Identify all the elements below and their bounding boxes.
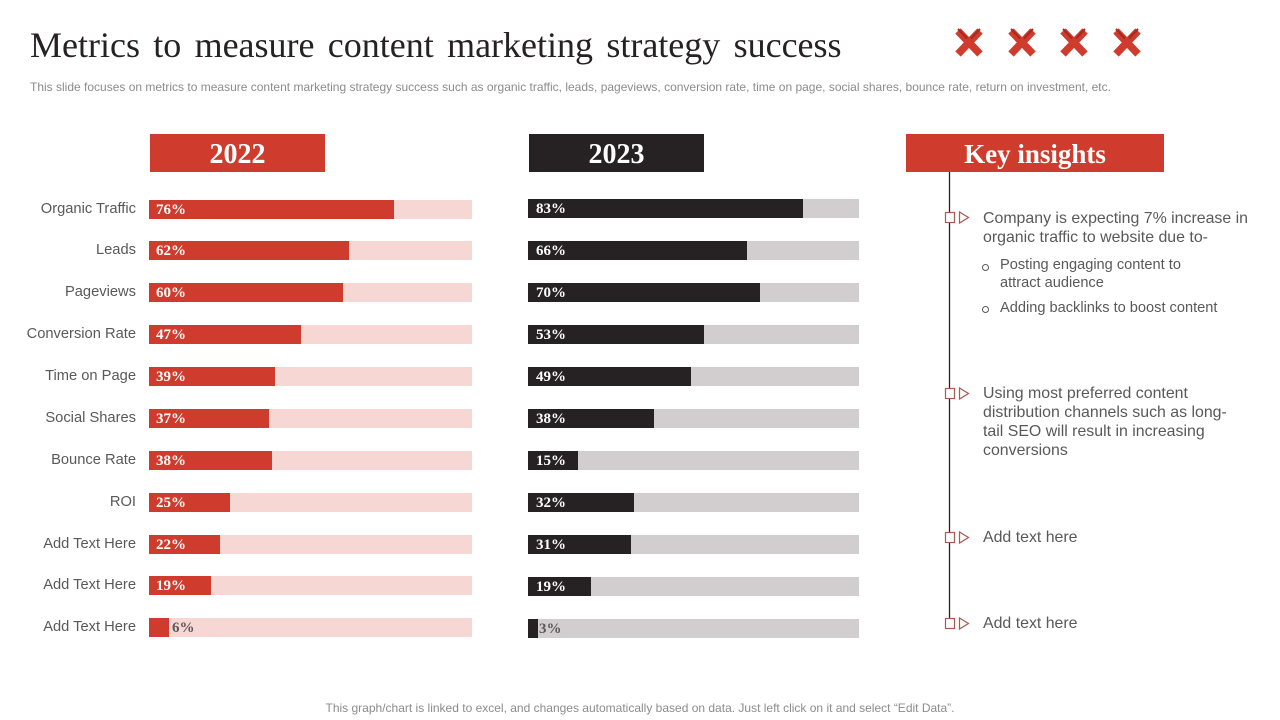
bar chart: 2022: 47% bbox=[156, 327, 186, 343]
title: Metrics to measure content marketing strategy success bbox=[30, 25, 842, 65]
bar chart: 2023: 32% bbox=[536, 495, 566, 511]
timeline with markers bbox=[944, 172, 970, 630]
metric labels: Add Text Here bbox=[43, 536, 136, 552]
insight: distribution channels: Using most preferred content bbox=[983, 385, 1188, 402]
bar chart: 2022: 6% bbox=[172, 620, 194, 636]
bar chart: 2022: 62% bbox=[156, 243, 186, 259]
insight bullet: engaging content bbox=[982, 257, 1181, 291]
bar chart: 2023: 66% bbox=[536, 243, 566, 259]
bar chart: 2023: 49% bbox=[536, 369, 566, 385]
bar chart: 2022: 37% bbox=[156, 411, 186, 427]
footnote: This graph/chart is linked to excel, and changes automatically based on data. Just left click on it and select “Edit Data”. bbox=[326, 701, 954, 715]
bar chart: 2022: 39% bbox=[156, 369, 186, 385]
insight: distribution channels: tail SEO will result in increasing bbox=[983, 423, 1205, 440]
heading: key insights: Key insights bbox=[964, 139, 1106, 169]
heading: key insights bbox=[906, 134, 1164, 172]
subtitle: This slide focuses on metrics to measure content marketing strategy success such as organic traffic, leads, pageviews, conversion rate, time on page, social shares, bounce rate, return on investment, etc. bbox=[30, 80, 1111, 94]
bar chart: 2023 bbox=[528, 199, 859, 638]
metric labels: Add Text Here bbox=[43, 619, 136, 635]
bar chart: 2023: 19% bbox=[536, 579, 566, 595]
metric labels bbox=[27, 201, 136, 635]
metric labels: Social Shares bbox=[45, 410, 136, 426]
bar chart: 2023: 3% bbox=[539, 621, 562, 637]
metric labels: Conversion Rate bbox=[27, 326, 136, 342]
insight bullet: engaging content: attract audience bbox=[1000, 275, 1104, 291]
heading: 2023 bbox=[529, 134, 704, 172]
insight bullet: backlinks: Adding backlinks to boost content bbox=[1000, 300, 1217, 316]
insight: add text 2: Add text here bbox=[983, 615, 1078, 632]
heading: 2023: 2023 bbox=[588, 139, 644, 170]
heading: 2022 bbox=[150, 134, 325, 172]
metric labels: Organic Traffic bbox=[41, 201, 136, 217]
insight: add text 1: Add text here bbox=[983, 529, 1078, 546]
bar chart: 2022 bbox=[149, 200, 472, 637]
insight: organic traffic bbox=[983, 210, 1248, 246]
heading: 2022: 2022 bbox=[210, 139, 266, 170]
bar chart: 2022: 22% bbox=[156, 537, 186, 553]
bar chart: 2023: 53% bbox=[536, 327, 566, 343]
metric labels: Leads bbox=[96, 242, 136, 258]
bar chart: 2022: 19% bbox=[156, 578, 186, 594]
bar chart: 2022: 60% bbox=[156, 285, 186, 301]
insight: distribution channels: conversions bbox=[983, 442, 1068, 459]
metric labels: ROI bbox=[110, 494, 136, 510]
insight: distribution channels bbox=[983, 385, 1227, 459]
icon: four red cross marks bbox=[955, 28, 1141, 57]
bar chart: 2023: 15% bbox=[536, 453, 566, 469]
bar chart: 2022: 76% bbox=[156, 202, 186, 218]
bar chart: 2023: 83% bbox=[536, 201, 566, 217]
insight bullet: engaging content: Posting engaging content to bbox=[1000, 257, 1181, 273]
bar chart: 2022: 38% bbox=[156, 453, 186, 469]
metric labels: Add Text Here bbox=[43, 577, 136, 593]
bar chart: 2023: 70% bbox=[536, 285, 566, 301]
metric labels: Time on Page bbox=[45, 368, 136, 384]
metric labels: Pageviews bbox=[65, 284, 136, 300]
insight: organic traffic: organic traffic to website due to- bbox=[983, 229, 1208, 246]
insight: organic traffic: Company is expecting 7% increase in bbox=[983, 210, 1248, 227]
bar chart: 2022: 25% bbox=[156, 495, 186, 511]
bar chart: 2023: 31% bbox=[536, 537, 566, 553]
insight: distribution channels: distribution channels such as long- bbox=[983, 404, 1227, 421]
bar chart: 2023: 38% bbox=[536, 411, 566, 427]
metric labels: Bounce Rate bbox=[51, 452, 136, 468]
